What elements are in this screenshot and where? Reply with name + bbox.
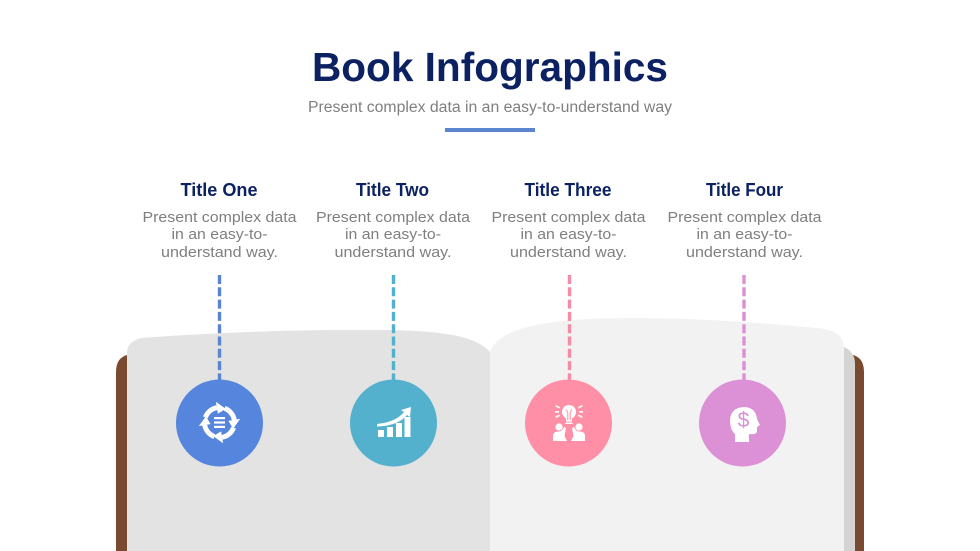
dashed connector: [392, 275, 395, 381]
dashed connector: [742, 275, 746, 381]
title underline: [445, 128, 535, 132]
icon: cycle document: [199, 402, 240, 443]
circle: [699, 380, 786, 466]
column 4: title four: understand way.: [686, 244, 803, 261]
right page: [490, 318, 844, 551]
column 4: title four: in an easy-to-: [696, 226, 792, 243]
left page: [127, 330, 490, 551]
column 3: title three: understand way.: [510, 244, 627, 261]
column 2: title two: understand way.: [334, 244, 452, 261]
column 1: title one: understand way.: [161, 244, 278, 261]
heading: Title Two: [356, 180, 429, 200]
description: Present complex data: [316, 209, 471, 226]
circle: [350, 380, 437, 466]
description: Present complex data: [142, 209, 297, 226]
book cover: [116, 355, 864, 551]
title: Book Infographics: [312, 44, 668, 90]
column 2: title two: in an easy-to-: [345, 226, 441, 243]
heading: Title Four: [706, 180, 783, 200]
circle: [176, 380, 263, 466]
dashed connector: [218, 275, 221, 381]
column 2: title two: [316, 180, 471, 466]
page stack edge: [840, 347, 855, 551]
subtitle: Present complex data in an easy-to-understand way: [308, 99, 672, 116]
column 3: title three: in an easy-to-: [520, 226, 616, 243]
column 4: title four: [668, 180, 822, 466]
description: Present complex data: [492, 209, 646, 226]
circle: [525, 380, 612, 466]
description: Present complex data: [668, 209, 822, 226]
icon: head with dollar: [730, 407, 760, 442]
icon: head with dollar: $: [738, 409, 750, 432]
icon: people with idea: [553, 405, 585, 441]
column 1: title one: in an easy-to-: [172, 226, 268, 243]
heading: Title Three: [524, 180, 612, 200]
icon: growth chart: [377, 407, 411, 437]
dashed connector: [568, 275, 571, 381]
book illustration: [116, 318, 864, 551]
heading: Title One: [180, 180, 258, 200]
column 1: title one: [142, 180, 297, 466]
column 3: title three: [492, 180, 646, 466]
